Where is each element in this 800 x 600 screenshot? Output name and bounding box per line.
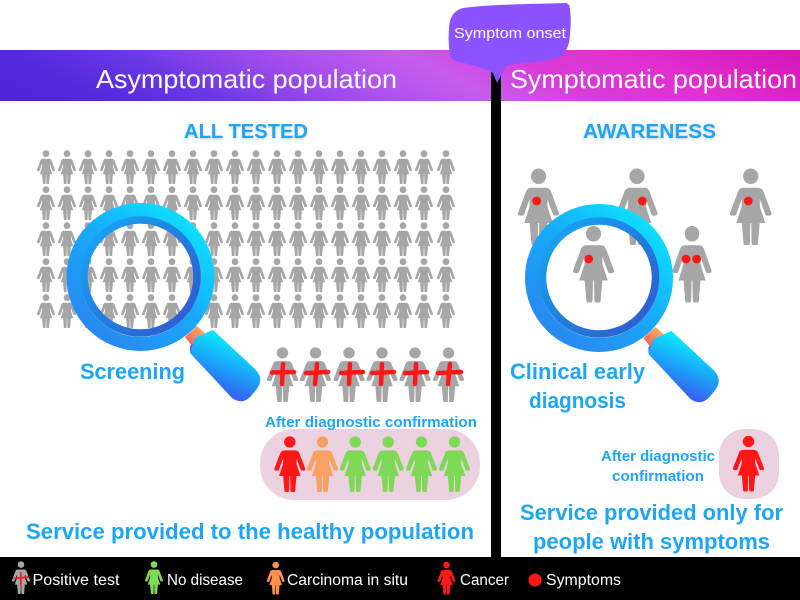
label: after diagnostic confirmation, symptomatic <box>601 448 715 485</box>
legend: positive test <box>12 561 120 594</box>
label: clinical early diagnosis: diagnosis <box>529 388 626 413</box>
callout: symptom onset <box>449 3 571 83</box>
pictogram grid: tested population <box>37 150 455 328</box>
label: after diagnostic confirmation, symptomatic: confirmation <box>612 468 704 485</box>
panel: diagnostic outcomes <box>260 429 480 500</box>
divider: symptom onset line <box>491 72 501 558</box>
text: service provided to the healthy population: Service provided to the healthy population <box>26 519 474 544</box>
legend: symptoms: Symptoms <box>546 572 621 589</box>
callout: symptom onset: Symptom onset <box>454 25 567 42</box>
text: service provided only for people with symptoms: Service provided only for <box>520 500 783 525</box>
positive test figures <box>267 347 464 402</box>
legend: carcinoma in situ: Carcinoma in situ <box>287 572 408 589</box>
legend: carcinoma in situ <box>267 562 408 594</box>
icon: magnifying glass, clinical diagnosis <box>532 211 719 402</box>
legend: no disease: No disease <box>167 572 243 589</box>
heading: asymptomatic population: Asymptomatic population <box>96 64 397 94</box>
legend: cancer <box>437 562 509 594</box>
legend: no disease <box>145 561 243 594</box>
symptomatic figures behind the lens <box>518 168 772 245</box>
label: after diagnostic confirmation, symptomatic: After diagnostic <box>601 448 715 465</box>
legend: cancer: Cancer <box>460 572 509 589</box>
label: clinical early diagnosis <box>510 359 645 413</box>
label: screening: Screening <box>80 359 185 384</box>
text: service provided only for people with symptoms <box>520 500 783 554</box>
label: clinical early diagnosis: Clinical early <box>510 359 645 384</box>
heading: awareness: AWARENESS <box>583 121 716 143</box>
figures in and beside the lens <box>573 226 712 302</box>
legend bar <box>0 557 800 600</box>
text: service provided only for people with symptoms: people with symptoms <box>533 529 770 554</box>
heading: all tested: ALL TESTED <box>184 121 308 143</box>
header band <box>0 50 800 101</box>
label: after diagnostic confirmation: After diagnostic confirmation <box>265 414 477 431</box>
panel: cancer outcome <box>719 429 779 499</box>
heading: symptomatic population: Symptomatic population <box>510 64 797 94</box>
icon: magnifying glass, screening <box>74 210 260 401</box>
legend: positive test: Positive test <box>32 572 120 589</box>
